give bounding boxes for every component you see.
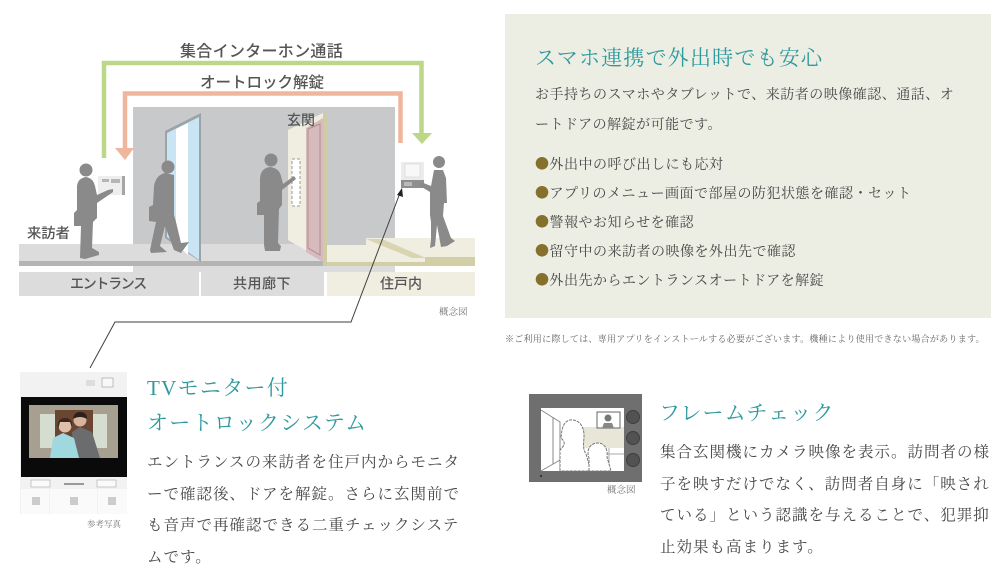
floor: residence interior <box>327 238 475 266</box>
feature list: 外出先からエントランスオートドアを解錠 <box>550 274 824 289</box>
location bar: common corridor: 共用廊下 <box>233 276 291 292</box>
feature list: 留守中の来訪者の映像を外出先で確認 <box>550 245 796 260</box>
monitor product photo <box>20 372 127 514</box>
auto-door with glass <box>165 113 201 262</box>
description: frame check <box>660 444 990 556</box>
figure: person walking through door <box>149 160 189 253</box>
feature list: アプリのメニュー画面で部屋の防犯状態を確認・セット <box>550 187 911 202</box>
description: frame check: ている」という認識を与えることで、犯罪抑 <box>660 507 990 524</box>
figure: visitor at entrance <box>74 164 113 259</box>
visitor outline: child <box>588 443 611 471</box>
arrow: auto-lock release <box>115 94 400 160</box>
intro text: ートドアの解錠が可能です。 <box>535 118 722 132</box>
arrow: intercom call <box>104 63 432 158</box>
heading: monitor auto-lock system: TVモニター付 <box>147 376 289 400</box>
heading: monitor auto-lock system <box>147 376 367 435</box>
feature list <box>535 154 911 290</box>
feature list: 警報やお知らせを確認 <box>550 216 694 231</box>
frame check monitor illustration <box>529 394 642 482</box>
text block: monitor auto-lock system <box>147 376 460 566</box>
control buttons <box>626 410 640 466</box>
indoor intercom monitor <box>401 162 424 188</box>
feature list: ● <box>535 241 549 261</box>
description: ムです。 <box>147 549 212 566</box>
visitor outline: adult <box>560 420 591 471</box>
description: も音声で再確認できる二重チェックシステ <box>147 517 459 534</box>
heading: frame check: フレームチェック <box>659 401 835 425</box>
man in photo <box>72 412 100 458</box>
location bar: residence: 住戸内 <box>380 276 422 292</box>
label: auto-lock release: オートロック解錠 <box>200 74 325 92</box>
description: frame check: 子を映すだけでなく、訪問者自身に「映され <box>660 476 990 493</box>
location bar: entrance: エントランス <box>70 276 146 292</box>
caption: frame check concept diagram: 概念図 <box>607 486 636 496</box>
entrance intercom panel <box>98 176 125 195</box>
floor: entrance and corridor <box>19 244 395 272</box>
caption: reference photo: 参考写真 <box>87 519 121 529</box>
woman in photo <box>50 418 79 458</box>
feature list: ● <box>535 154 549 174</box>
description: frame check: 止効果も高まります。 <box>660 539 824 556</box>
wall: common corridor <box>133 107 395 272</box>
description: frame check: 集合玄関機にカメラ映像を表示。訪問者の様 <box>660 444 990 461</box>
intro text <box>535 86 954 132</box>
entrance door <box>288 113 327 266</box>
feature list: ● <box>535 212 549 232</box>
location bar: entrance <box>19 272 199 296</box>
location bar: common corridor <box>201 272 324 296</box>
caption: concept diagram: 概念図 <box>439 308 468 318</box>
access diagram <box>19 42 475 368</box>
description <box>147 454 460 566</box>
intro text: お手持ちのスマホやタブレットで、来訪者の映像確認、通話、オ <box>535 88 954 103</box>
footnote: ※ご利用に際しては、専用アプリをインストールする必要がございます。機種により使用できない場合があります。 <box>505 334 985 344</box>
heading: smartphone link: スマホ連携で外出時でも安心 <box>535 46 823 70</box>
text block: frame check <box>659 401 990 556</box>
feature list: ● <box>535 270 549 290</box>
label: intercom call: 集合インターホン通話 <box>180 42 343 60</box>
label: visitor: 来訪者 <box>27 225 70 242</box>
figure: person at front door <box>257 154 296 251</box>
feature list: 外出中の呼び出しにも応対 <box>550 158 724 173</box>
label: entrance: 玄関 <box>287 112 315 128</box>
screen background <box>541 410 624 471</box>
description: ーで確認後、ドアを解錠。さらに玄関前で <box>147 486 460 503</box>
panel: smartphone link <box>505 14 991 318</box>
leader line to monitor <box>90 188 403 368</box>
location bar: residence <box>327 272 475 296</box>
heading: monitor auto-lock system: オートロックシステム <box>147 411 367 435</box>
inset camera window <box>597 412 620 428</box>
feature list: ● <box>535 183 549 203</box>
description: エントランスの来訪者を住戸内からモニタ <box>147 454 460 471</box>
figure: resident <box>420 156 455 248</box>
